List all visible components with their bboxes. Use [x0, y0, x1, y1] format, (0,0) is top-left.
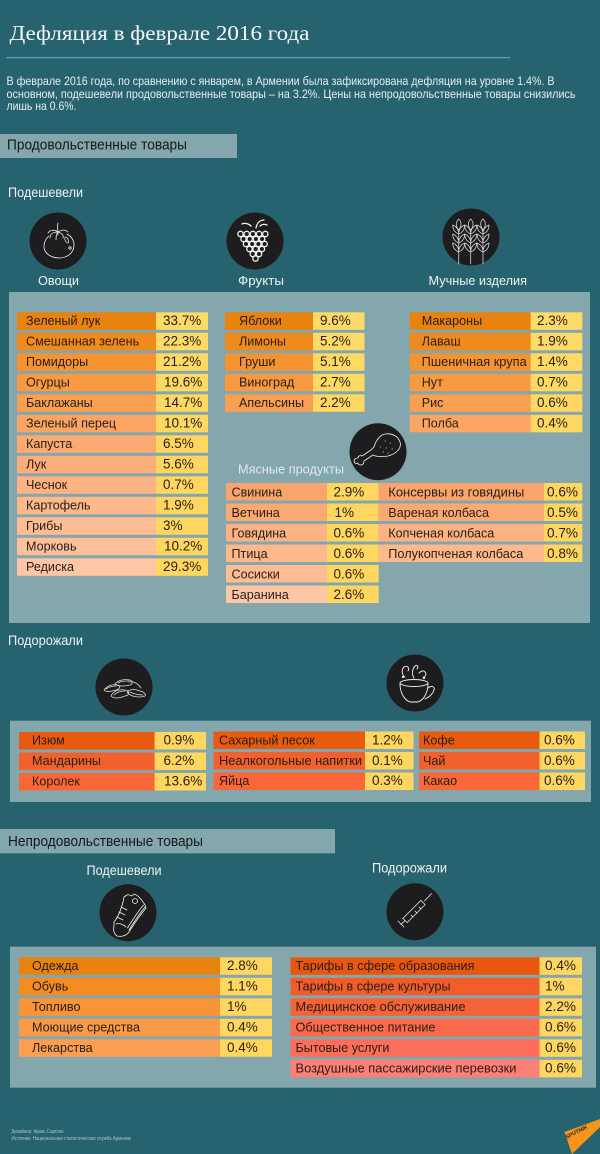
icon: wheat	[442, 208, 500, 266]
table: meat right	[379, 483, 582, 562]
table: meat right: Копченая колбаса	[388, 526, 494, 540]
table: non-food cheaper: 0.4%	[227, 1040, 258, 1055]
table: flour products: Пшеничная крупа	[422, 355, 527, 369]
table: vegetables: Морковь	[26, 540, 77, 554]
icon: tomato	[30, 212, 86, 270]
table: meat left: 1%	[334, 505, 354, 520]
table: meat right: 0.5%	[547, 505, 578, 520]
table: flour products: 0.6%	[537, 395, 568, 410]
icon: grapes	[226, 212, 284, 270]
table: flour products: 0.7%	[537, 374, 568, 390]
table: coffee group: 0.6%	[544, 753, 575, 768]
table: non-food pricier: Бытовые услуги	[296, 1041, 389, 1055]
logo: sputnik: SPUTNIK	[565, 1124, 589, 1141]
subheading: pricier non-food: Подорожали	[372, 861, 447, 876]
table: flour products: 1.9%	[537, 334, 568, 348]
credits	[12, 1128, 131, 1142]
table: vegetables: Капуста	[26, 437, 72, 451]
table: meat left: Свинина	[232, 486, 282, 500]
table: non-food cheaper: Лекарства	[32, 1041, 93, 1055]
table: sugar group: Неалкогольные напитки	[219, 754, 362, 768]
table: fruits: 5.2%	[320, 334, 351, 348]
table: vegetables: Чеснок	[26, 478, 68, 492]
table: vegetables: 3%	[163, 518, 183, 533]
table: vegetables	[17, 312, 208, 576]
intro text: лишь на 0.6%.	[6, 99, 76, 113]
label: flour products: Мучные изделия	[428, 273, 527, 288]
table: vegetables: Зеленый перец	[26, 416, 116, 430]
table: non-food cheaper: Обувь	[32, 980, 69, 994]
table: vegetables: 10.2%	[164, 538, 202, 554]
table: fruits: Груши	[239, 355, 275, 369]
table: non-food pricier	[290, 957, 582, 1077]
table: non-food cheaper: 1%	[227, 999, 247, 1014]
section heading: non-food: Непродовольственные товары	[8, 834, 203, 850]
table: fruits: 2.7%	[320, 374, 351, 390]
intro text	[6, 74, 576, 113]
table: vegetables: Грибы	[26, 519, 62, 533]
table: flour products: Макароны	[422, 314, 482, 328]
table: vegetables: 0.7%	[163, 477, 194, 492]
table: vegetables: Зеленый лук	[26, 314, 101, 328]
section heading: non-food	[0, 829, 335, 853]
table: flour products: Полба	[422, 416, 459, 430]
table: meat right: Вареная колбаса	[388, 506, 489, 520]
table: sugar group	[214, 732, 414, 790]
table: meat left: 0.6%	[334, 526, 364, 540]
table: raisins group: Мандарины	[32, 754, 101, 768]
table: fruits: 5.1%	[320, 354, 351, 369]
table: non-food pricier: Общественное питание	[296, 1020, 436, 1034]
table: vegetables: 5.6%	[163, 456, 194, 472]
table: non-food pricier: Тарифы в сфере культуры	[296, 980, 450, 994]
table: flour products: Нут	[422, 376, 443, 390]
table: non-food pricier: 0.4%	[545, 958, 576, 973]
table: vegetables: 1.9%	[163, 498, 194, 512]
table: meat right: Консервы из говядины	[388, 486, 524, 500]
table: vegetables: Помидоры	[26, 355, 88, 369]
table: fruits	[225, 312, 364, 412]
table: non-food cheaper: 2.8%	[227, 958, 258, 973]
table: non-food cheaper	[19, 957, 272, 1057]
table: meat left: 0.6%	[334, 566, 364, 582]
table: vegetables: 6.5%	[163, 436, 194, 451]
table: vegetables: 29.3%	[163, 559, 201, 574]
table: fruits: Яблоки	[239, 314, 282, 328]
table: vegetables: Редиска	[26, 560, 74, 574]
label: meat products: Мясные продукты	[238, 462, 344, 476]
panel: non-food	[10, 947, 596, 1088]
table: vegetables: 19.6%	[164, 374, 202, 390]
table: coffee group: Кофе	[423, 734, 455, 748]
table: vegetables: 22.3%	[163, 334, 201, 348]
table: non-food pricier: Тарифы в сфере образования	[296, 959, 474, 973]
icon: coffee cup	[386, 654, 444, 712]
subheading: cheaper food: Подешевели	[8, 185, 83, 200]
table: vegetables: Картофель	[26, 498, 91, 512]
icon: raisins	[96, 658, 152, 716]
table: coffee group: Какао	[423, 774, 457, 788]
table: sugar group: 0.3%	[372, 773, 403, 788]
table: flour products: 0.4%	[537, 416, 568, 430]
table: meat right: 0.8%	[547, 546, 578, 561]
table: fruits: Виноград	[239, 376, 295, 390]
table: coffee group: 0.6%	[544, 773, 575, 788]
table: raisins group: 0.9%	[164, 732, 194, 748]
panel: pricier food	[10, 721, 591, 802]
table: meat right: 0.7%	[547, 526, 578, 540]
table: meat right: Полукопченая колбаса	[388, 547, 523, 561]
table: sugar group: Сахарный песок	[219, 734, 315, 748]
table: vegetables: Баклажаны	[26, 396, 93, 410]
table: flour products: 1.4%	[537, 354, 568, 369]
table: meat left: 2.9%	[334, 484, 364, 500]
table: vegetables: 33.7%	[163, 313, 201, 328]
table: coffee group: 0.6%	[544, 732, 575, 748]
table: meat left: Баранина	[232, 588, 289, 602]
icon: sneaker	[100, 884, 156, 941]
table: flour products: Лаваш	[422, 334, 461, 348]
panel: cheaper food	[9, 292, 590, 623]
table: meat left: Сосиски	[232, 568, 280, 582]
label: vegetables: Овощи	[38, 273, 79, 288]
table: sugar group: Яйца	[219, 774, 249, 788]
table: sugar group: 0.1%	[372, 753, 403, 768]
table: flour products	[410, 312, 582, 432]
table: non-food cheaper: Топливо	[32, 1000, 80, 1014]
table: flour products: Рис	[422, 396, 443, 410]
table: meat left: Говядина	[232, 526, 286, 540]
logo: sputnik	[564, 1119, 600, 1154]
table: vegetables: Смешанная зелень	[26, 334, 140, 348]
table: non-food cheaper: Моющие средства	[32, 1020, 140, 1034]
label: fruits: Фрукты	[238, 273, 284, 288]
table: raisins group: 6.2%	[164, 753, 194, 768]
table: sugar group: 1.2%	[372, 732, 403, 748]
table: raisins group: Королек	[32, 774, 80, 788]
table: non-food pricier: 0.6%	[545, 1060, 576, 1076]
credits: Источник: Национальная статистическая служба Армении	[12, 1136, 131, 1142]
subheading: pricier food: Подорожали	[8, 633, 83, 648]
table: vegetables: 21.2%	[163, 354, 201, 369]
section heading: food: Продовольственные товары	[7, 138, 187, 154]
table: coffee group: Чай	[423, 754, 445, 768]
icon: syringe	[386, 883, 444, 940]
table: meat right: 0.6%	[547, 484, 578, 500]
table: non-food pricier: 1%	[545, 978, 565, 994]
table: flour products: 2.3%	[537, 313, 568, 328]
subheading: cheaper non-food: Подешевели	[86, 863, 162, 878]
table: vegetables: 14.7%	[164, 395, 202, 410]
credits: Дизайнер: Аракс Саргсян	[12, 1128, 64, 1135]
table: raisins group: 13.6%	[164, 774, 202, 788]
table: non-food cheaper: 0.4%	[227, 1020, 258, 1034]
table: fruits: 9.6%	[320, 313, 351, 328]
table: vegetables: 10.1%	[164, 416, 202, 430]
table: non-food pricier: Медицинское обслуживание	[296, 1000, 466, 1014]
table: non-food pricier: 0.6%	[545, 1020, 576, 1034]
table: vegetables: Лук	[26, 458, 47, 472]
table: non-food cheaper: Одежда	[32, 959, 79, 973]
title: Дефляция в феврале 2016 года	[10, 21, 310, 45]
table: meat left: Птица	[232, 547, 268, 561]
table: meat left: Ветчина	[232, 506, 280, 520]
table: non-food pricier: Воздушные пассажирские перевозки	[296, 1062, 516, 1076]
table: meat left	[226, 483, 379, 603]
table: vegetables: Огурцы	[26, 376, 70, 390]
table: fruits: Апельсины	[239, 396, 304, 410]
table: non-food cheaper: 1.1%	[227, 978, 258, 994]
icon: chicken leg	[350, 423, 406, 480]
section heading: food	[0, 134, 237, 158]
table: raisins group	[19, 732, 206, 790]
table: meat left: 2.6%	[334, 587, 364, 602]
table: meat left: 0.6%	[334, 546, 364, 561]
table: coffee group	[419, 732, 585, 790]
table: raisins group: Изюм	[32, 734, 65, 748]
table: non-food pricier: 2.2%	[545, 999, 576, 1014]
table: fruits: Лимоны	[239, 334, 286, 348]
table: fruits: 2.2%	[320, 395, 351, 410]
table: non-food pricier: 0.6%	[545, 1040, 576, 1055]
